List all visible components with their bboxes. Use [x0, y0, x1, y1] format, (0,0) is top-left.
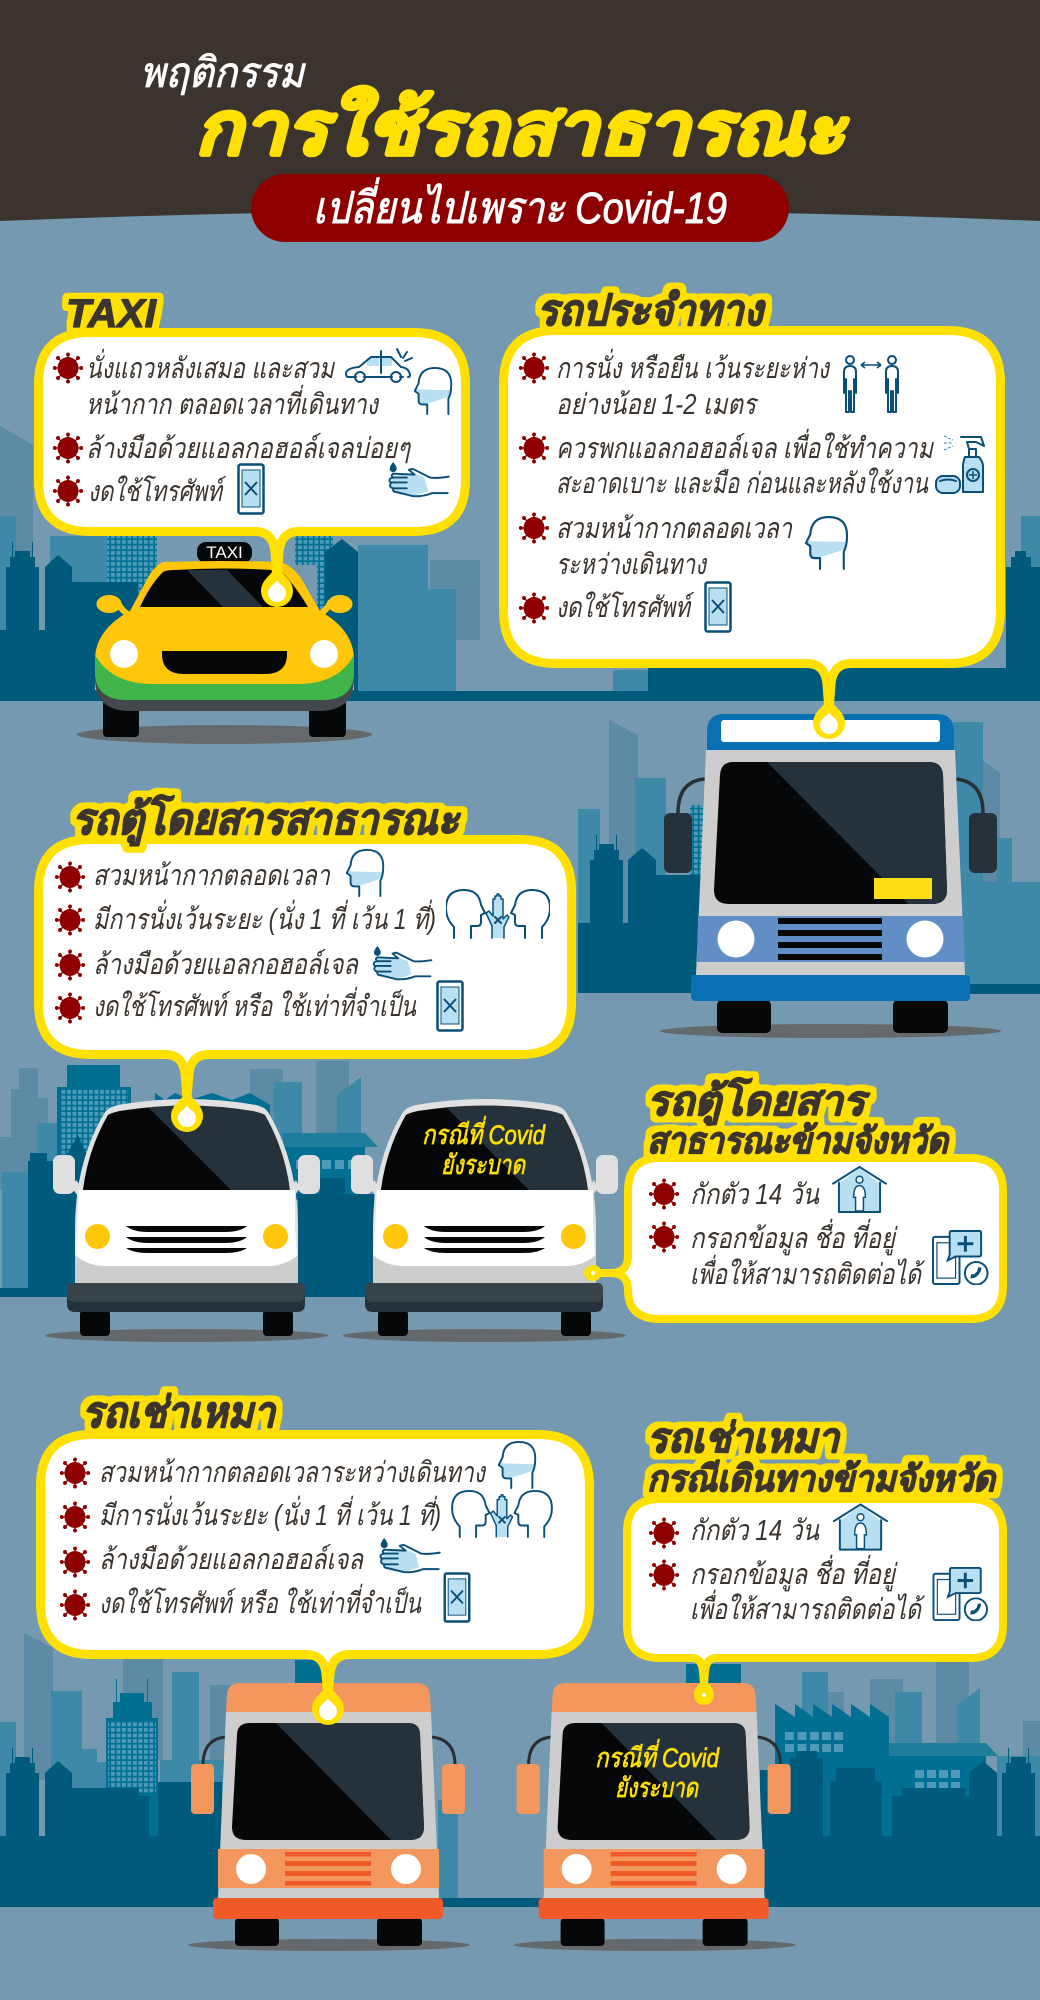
- van bullet 4: งดใช้โทรศัพท์ หรือ ใช้เท่าที่จำเป็น: [93, 986, 417, 1023]
- red pill subtitle: เปลี่ยนไปเพราะ Covid-19: [313, 177, 727, 233]
- taxi bullet 1: หน้ากาก ตลอดเวลาที่เดินทาง: [86, 384, 380, 421]
- vehicle: taxi: [77, 542, 372, 744]
- icon: phone off: [445, 1573, 469, 1622]
- skyline: van row: [0, 1061, 378, 1297]
- vehicle: van 2: [343, 1099, 626, 1342]
- heading: กรณีเดินทางข้ามจังหวัด: [647, 1458, 997, 1499]
- vehicle: van 1: [45, 1099, 328, 1342]
- charter bullet 1: สวมหน้ากากตลอดเวลาระหว่างเดินทาง: [99, 1457, 487, 1489]
- bus bullet 4: งดใช้โทรศัพท์: [556, 591, 695, 624]
- heading: รถประจำทาง: [537, 287, 766, 335]
- bus bullet 1: อย่างน้อย 1-2 เมตร: [556, 389, 759, 421]
- icon: contact phone: [934, 1568, 987, 1621]
- vehicle: orange bus 2: ยังระบาด: [615, 1773, 699, 1803]
- van bullet 4: [56, 986, 417, 1023]
- panel: public van: [38, 794, 572, 1132]
- cross-province van bullet 1: [650, 1179, 820, 1211]
- van bullet 2: มีการนั่งเว้นระยะ (นั่ง 1 ที่ เว้น 1 ที่): [93, 899, 436, 936]
- charter bullet 2: [60, 1495, 441, 1532]
- bus bullet 4: [520, 591, 695, 624]
- heading: รถเช่าเหมา: [82, 1389, 277, 1437]
- bus bullet 2: [520, 428, 934, 500]
- taxi bullet 3: [54, 475, 227, 508]
- title block: [140, 49, 849, 170]
- icon: sponge: [936, 476, 960, 493]
- vehicle: city bus: [660, 714, 1001, 1038]
- icon: head with mask: [415, 368, 451, 414]
- icon: head with mask: [347, 850, 383, 896]
- icon: head with mask: [499, 1442, 535, 1488]
- skyline: middle right: [578, 720, 1040, 994]
- charter bullet 4: งดใช้โทรศัพท์ หรือ ใช้เท่าที่จำเป็น: [99, 1583, 422, 1620]
- icon: contact phone: [933, 1231, 988, 1285]
- icon: hand washing: [374, 946, 431, 979]
- van bullet 2: [56, 899, 436, 936]
- cross-province charter bullet 2: [650, 1554, 925, 1626]
- taxi bullet 1: [54, 348, 380, 421]
- heading: รถตู้โดยสาร: [647, 1077, 871, 1127]
- skyline: upper row: [0, 426, 1040, 701]
- heading: [647, 1077, 950, 1161]
- charter bullet 3: ล้างมือด้วยแอลกอฮอล์เจล: [99, 1544, 364, 1576]
- taxi bullet 3: งดใช้โทรศัพท์: [88, 475, 227, 508]
- header background: [0, 0, 1040, 221]
- heading: รถเช่าเหมา: [647, 1415, 841, 1461]
- panel: charter bus: [40, 1389, 590, 1725]
- bus bullet 1: การนั่ง หรือยืน เว้นระยะห่าง: [556, 348, 831, 385]
- skyline: bottom row: [0, 1633, 1040, 1907]
- connector drop: [694, 1675, 714, 1705]
- cross-province charter bullet 2: กรอกข้อมูล ชื่อ ที่อยู่: [690, 1554, 898, 1592]
- vehicle: orange bus 2: กรณีที่ Covid: [595, 1739, 720, 1773]
- heading: TAXI: [66, 292, 157, 336]
- icon: distancing people: [844, 356, 898, 412]
- heading: สาธารณะข้ามจังหวัด: [647, 1120, 950, 1161]
- icon: phone off: [706, 582, 730, 632]
- icon: spray bottle: [944, 436, 984, 492]
- icon: house quarantine: [833, 1167, 886, 1212]
- cross-province charter bullet 2: เพื่อให้สามารถติดต่อได้: [690, 1589, 925, 1626]
- cross-province charter bullet 1: [650, 1515, 820, 1548]
- cross-province charter bullet 1: กักตัว 14 วัน: [690, 1515, 820, 1547]
- main title: การใช้รถสาธารณะ: [195, 86, 849, 170]
- icon: seat spacing: [446, 890, 550, 938]
- bus bullet 2: สะอาดเบาะ และมือ ก่อนและหลังใช้งาน: [556, 467, 929, 500]
- van bullet 3: ล้างมือด้วยแอลกอฮอล์เจล: [93, 949, 359, 981]
- heading: [647, 1415, 997, 1499]
- vehicle: van 2: ยังระบาด: [441, 1150, 526, 1180]
- icon: head with mask: [806, 517, 847, 569]
- panel: cross-province van: [584, 1077, 1003, 1319]
- panel: taxi: [38, 292, 466, 607]
- panel: fixed-route bus: [504, 287, 1000, 739]
- icon: hand washing: [380, 1538, 440, 1572]
- icon: phone off: [238, 464, 264, 514]
- red pill subtitle: [251, 174, 789, 242]
- icon: house quarantine: [834, 1504, 887, 1550]
- vehicle: van 2: กรณีที่ Covid: [422, 1116, 546, 1150]
- taxi bullet 1: นั่งแถวหลังเสมอ และสวม: [86, 348, 335, 385]
- vehicle: taxi: TAXI: [206, 543, 243, 562]
- subtitle: behaviour: พฤติกรรม: [140, 49, 306, 96]
- bus bullet 3: สวมหน้ากากตลอดเวลา: [556, 513, 793, 545]
- icon: hand washing: [389, 462, 449, 496]
- taxi bullet 2: ล้างมือด้วยแอลกอฮอล์เจลบ่อยๆ: [86, 433, 411, 465]
- bus bullet 1: [520, 348, 831, 421]
- bus bullet 3: [520, 513, 793, 581]
- van bullet 1: สวมหน้ากากตลอดเวลา: [93, 860, 331, 892]
- vehicle: orange bus 2: [514, 1683, 796, 1951]
- connector drop: [584, 1265, 602, 1281]
- bus bullet 2: ควรพกแอลกอฮอล์เจล เพื่อใช้ทำความ: [556, 428, 934, 465]
- icon: taxi car: [346, 349, 412, 382]
- vehicle: orange bus 1: [188, 1683, 470, 1951]
- cross-province van bullet 2: [650, 1218, 925, 1291]
- icon: phone off: [438, 982, 462, 1030]
- cross-province van bullet 2: เพื่อให้สามารถติดต่อได้: [690, 1254, 925, 1291]
- cross-province van bullet 2: กรอกข้อมูล ชื่อ ที่อยู่: [690, 1218, 898, 1256]
- cross-province van bullet 1: กักตัว 14 วัน: [690, 1179, 820, 1211]
- icon: seat spacing: [452, 1491, 552, 1537]
- heading: รถตู้โดยสารสาธารณะ: [72, 794, 462, 846]
- bus bullet 3: ระหว่างเดินทาง: [556, 549, 708, 581]
- charter bullet 4: [60, 1583, 422, 1620]
- charter bullet 2: มีการนั่งเว้นระยะ (นั่ง 1 ที่ เว้น 1 ที่): [99, 1495, 441, 1532]
- panel: cross-province charter bus: [627, 1415, 1003, 1705]
